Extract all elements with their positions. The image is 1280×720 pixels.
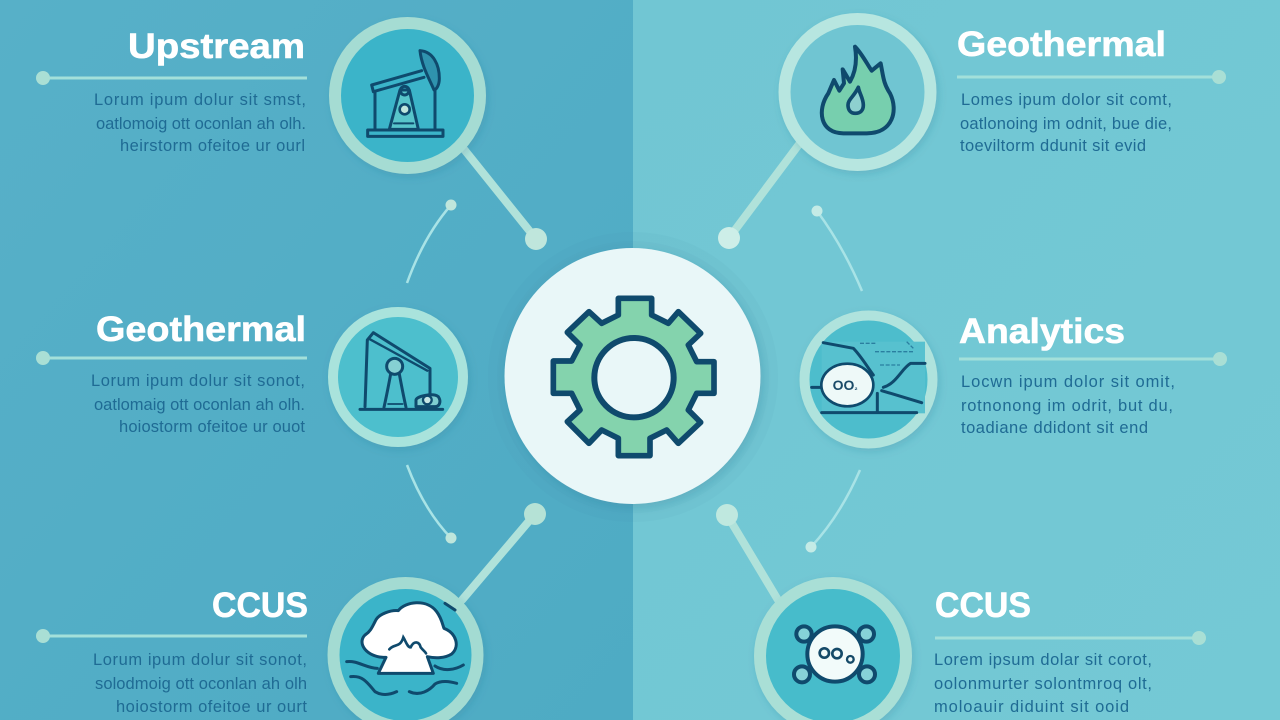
node: upstream pump jack [335, 23, 480, 168]
body text: oatlomoig ott oconlan ah olh. [96, 115, 306, 133]
rule with dot [36, 71, 307, 85]
heading: CCUS [935, 586, 1031, 625]
rule with dot [36, 629, 307, 643]
icon: CO2 molecule [794, 626, 875, 682]
curved link: lower right [806, 470, 860, 552]
body text: oatlonoing im odnit, bue die, [960, 115, 1172, 133]
block: analytics [959, 312, 1227, 437]
block: ccus right [934, 586, 1206, 716]
background: left panel [0, 0, 633, 720]
heading: Analytics [959, 312, 1125, 351]
block: upstream [36, 27, 307, 155]
icon: flame [822, 47, 894, 133]
curved link: lower left [407, 465, 456, 544]
body text: oatlomaig ott oconlan ah olh. [94, 396, 305, 414]
central hub circle with gear [504, 248, 760, 504]
node: top right flame [784, 19, 930, 165]
body text: heirstorm ofeitoe ur ourl [120, 137, 305, 155]
node: bottom right molecule [760, 583, 906, 720]
connector: bottom left to hub [462, 503, 546, 600]
background: right panel [633, 0, 1280, 720]
body text: hoiostorm ofeitoe ur ourt [116, 698, 307, 716]
body text: Lomes ipum dolor sit comt, [961, 91, 1172, 109]
body text: Lorum ipum dolur sit smst, [94, 91, 306, 109]
heading: CCUS [212, 586, 308, 625]
connector: bottom right to hub [716, 504, 778, 600]
rule with dot [935, 631, 1206, 645]
body text [960, 91, 1172, 155]
connector: top right to hub [718, 143, 800, 249]
body text [94, 91, 306, 155]
icon: geothermal rig [360, 333, 443, 409]
node: bottom left storage cloud [334, 583, 478, 720]
body text: Lorem ipsum dolar sit corot, [934, 651, 1152, 669]
icon: oil pump jack [368, 51, 443, 136]
heading: Geothermal [96, 310, 306, 349]
body text: toadiane ddidont sit end [961, 419, 1148, 437]
block: geothermal left [36, 310, 307, 436]
rule with dot [959, 352, 1227, 366]
body text [91, 372, 305, 436]
body text [961, 373, 1175, 437]
body text: moloauir diduint sit ooid [934, 698, 1129, 716]
body text: Locwn ipum dolor sit omit, [961, 373, 1175, 391]
body text: Lorum ipum dolur sit sonot, [91, 372, 305, 390]
central hub halo [488, 232, 778, 522]
icon: gear [553, 298, 714, 456]
icon: CO2 analytics map: OO₂ [833, 377, 858, 393]
rule with dot [36, 351, 307, 365]
body text: hoiostorm ofeitoe ur ouot [119, 418, 305, 436]
body text: oolonmurter solontmroq olt, [934, 675, 1152, 693]
body text: Lorum ipum dolur sit sonot, [93, 651, 307, 669]
rule with dot [957, 70, 1226, 84]
body text: solodmoig ott oconlan ah olh [95, 675, 307, 693]
node: middle right analytics map [804, 316, 932, 444]
heading: Upstream [128, 27, 305, 66]
body text [934, 651, 1152, 716]
curved link: upper left [407, 200, 456, 283]
body text: toeviltorm ddunit sit evid [960, 137, 1146, 155]
body text [93, 651, 307, 716]
node: middle left geothermal rig [333, 312, 463, 442]
icon: cloud over water [347, 603, 463, 695]
block: geothermal right [957, 25, 1226, 155]
body text: rotnonong im odrit, but du, [961, 397, 1173, 415]
connector: upstream to hub [463, 148, 547, 250]
block: ccus left [36, 586, 308, 716]
curved link: upper right [812, 206, 862, 291]
heading: Geothermal [957, 25, 1166, 64]
